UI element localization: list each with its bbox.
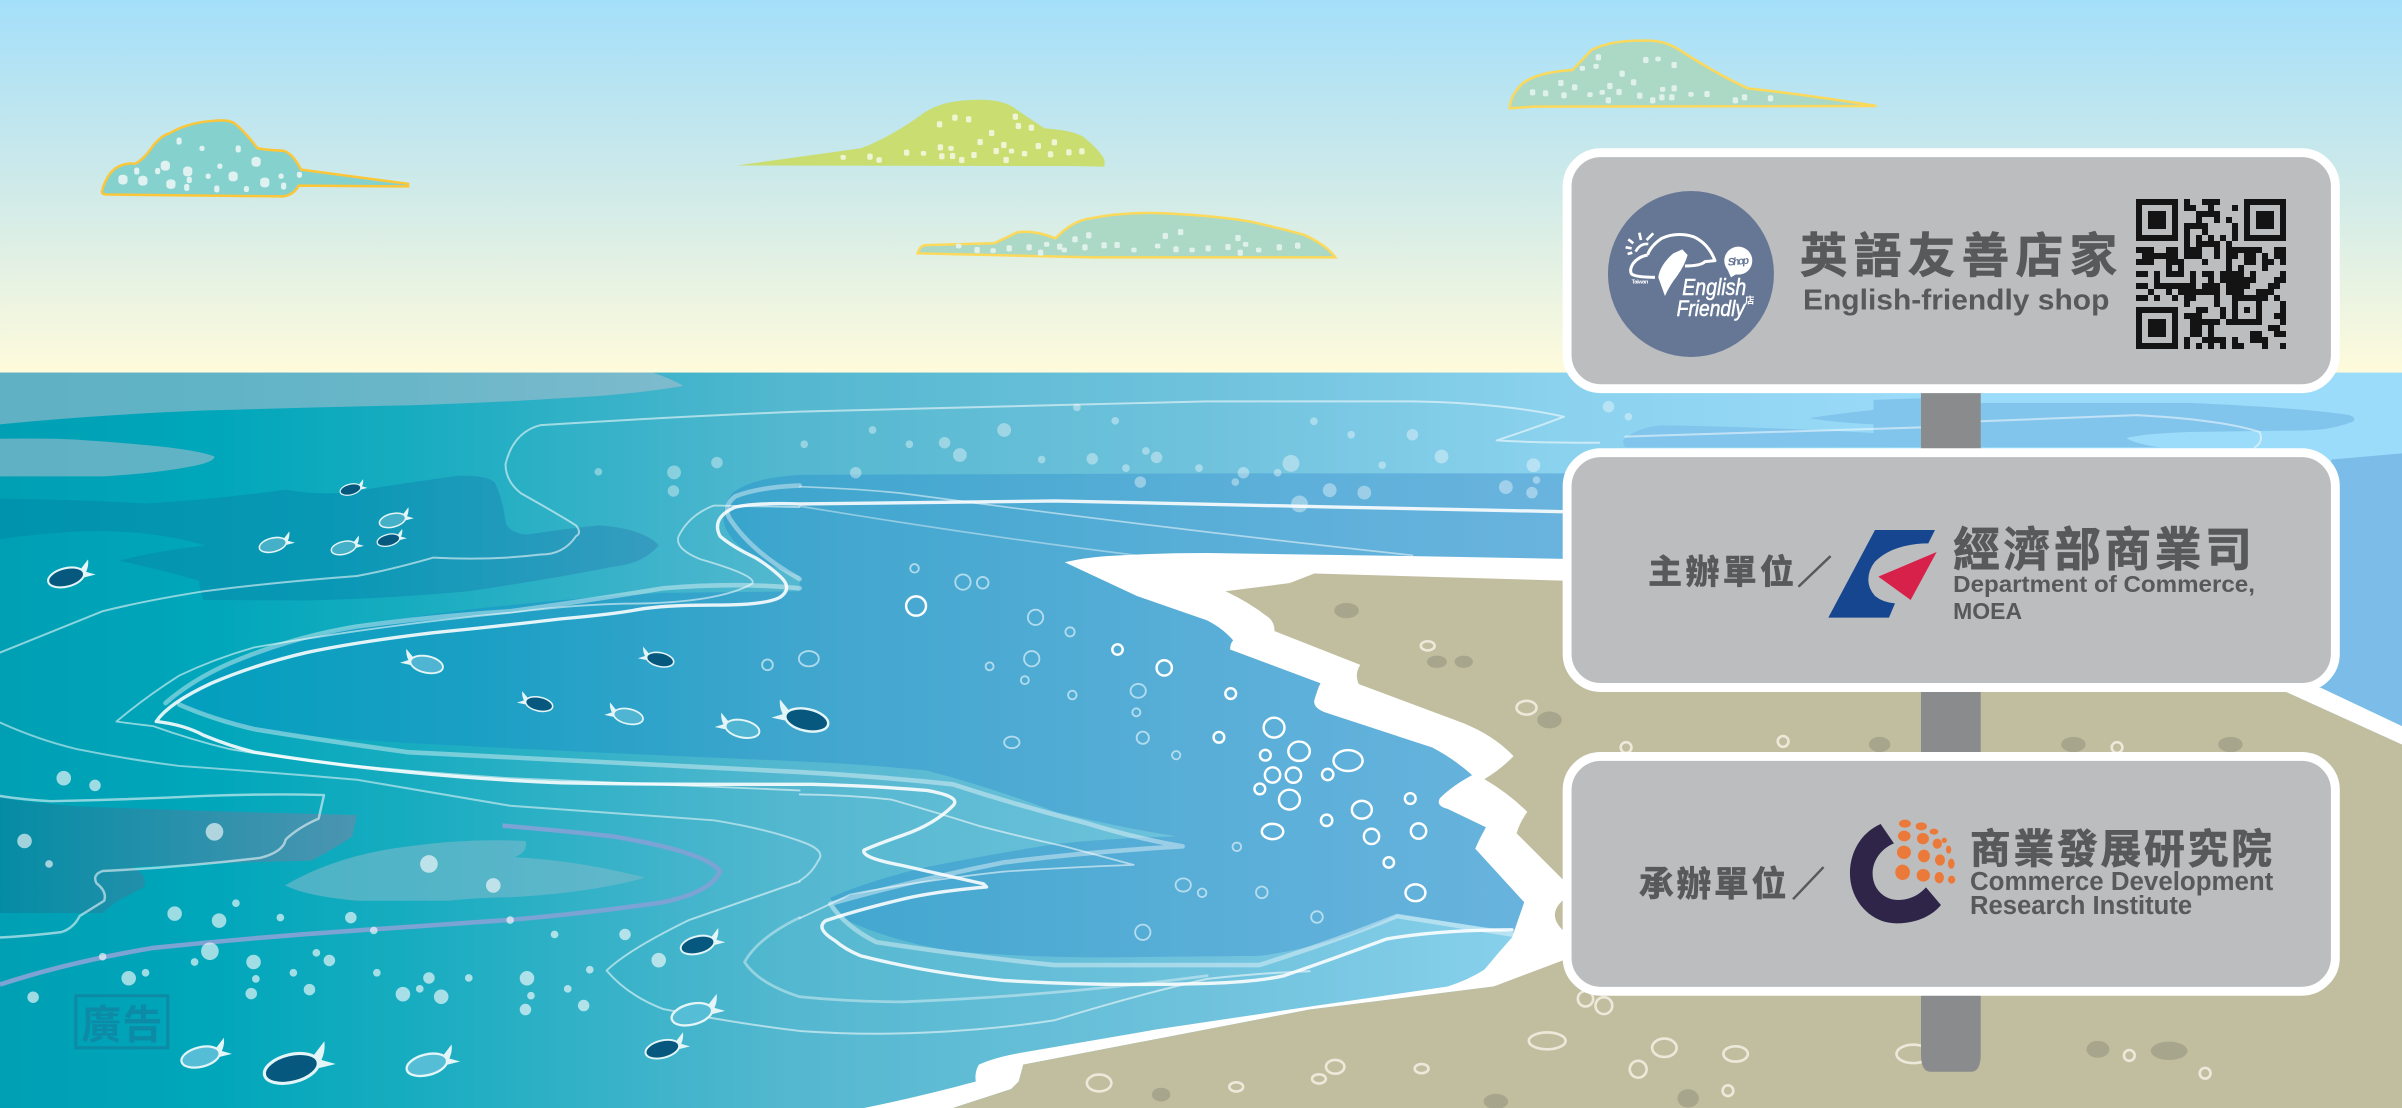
foam strip on right of sign <box>2282 688 2402 744</box>
divider slash <box>1793 867 1824 899</box>
waves: thin white line around lagoon <box>116 506 800 790</box>
bubbles: solid water bubbles lower left <box>25 778 659 1010</box>
panel: organizer <box>1567 453 2335 688</box>
waves: translucent lagoon edge <box>165 486 1512 965</box>
organizer name zh: 經濟部商業司 <box>1953 524 2252 576</box>
bubbles: faint water bubbles top band <box>598 407 1628 504</box>
organizer name en: Department of Commerce, <box>1953 571 2255 597</box>
shell rings on sand <box>1087 641 2211 1096</box>
executor name en line 2: Research Institute <box>1970 890 2192 920</box>
lagoon: main blue water body <box>169 473 1578 957</box>
sea: light patch bottom left <box>285 840 645 901</box>
waves: bright white line around lagoon <box>156 501 1563 984</box>
sea: deep water patch upper left <box>0 476 659 600</box>
waves: purple current line <box>0 826 720 985</box>
bubbles: ring outlines bright <box>906 596 1426 901</box>
icon: English-friendly logo: 店 <box>1745 294 1754 305</box>
panel: executor <box>1567 756 2335 991</box>
QR code <box>2136 199 2286 349</box>
cloud: left turquoise <box>102 120 408 196</box>
cloud: green centre <box>737 100 1104 167</box>
sky background <box>0 0 2402 374</box>
subheading: English-friendly shop: English-friendly shop <box>1803 284 2109 316</box>
icon: English-friendly logo: Friendly <box>1677 296 1747 321</box>
shoreline white foam <box>864 553 1578 1108</box>
divider slash <box>1798 556 1831 587</box>
label: 承辦單位: 承辦單位 <box>1639 866 1786 904</box>
organizer abbreviation: MOEA <box>1953 598 2022 624</box>
heading: 英語友善店家: 英語友善店家 <box>1800 231 2117 284</box>
waves: long thin swirl lines <box>0 401 2261 1034</box>
bubbles: ring outlines faint <box>762 564 1323 940</box>
sea: light patch left <box>0 439 214 476</box>
logo: Department of Commerce <box>1828 530 1937 618</box>
icon: English-friendly logo <box>1608 191 1774 357</box>
panel: English-friendly shop <box>1567 153 2335 389</box>
logo: Commerce Development Research Institute <box>1850 820 1955 923</box>
sand beach <box>953 574 2402 1108</box>
pebbles on sand <box>1152 603 2243 1108</box>
executor name zh: 商業發展研究院 <box>1970 826 2272 872</box>
sea: light band at horizon left <box>0 373 683 424</box>
icon: English-friendly logo: Shop <box>1727 255 1750 269</box>
sand bump by lower panel <box>1555 899 1564 931</box>
icon: English-friendly logo: English <box>1682 274 1746 300</box>
label: 主辦單位: 主辦單位 <box>1648 554 1794 592</box>
executor name en line 1: Commerce Development <box>1970 866 2274 896</box>
fish school <box>45 479 831 1088</box>
sea: dark patch behind sign post <box>1623 398 2354 447</box>
advertisement stamp: 廣告 <box>81 1004 162 1048</box>
sign post <box>1921 383 1981 1072</box>
sea base <box>0 373 2402 1108</box>
cloud: lower centre <box>918 213 1335 257</box>
icon: English-friendly logo: Taiwan <box>1632 279 1649 285</box>
sea: strip of blue water right of sign <box>2287 453 2402 744</box>
cloud: upper right <box>1510 41 1877 108</box>
sea: deep water patch lower left <box>0 798 357 913</box>
